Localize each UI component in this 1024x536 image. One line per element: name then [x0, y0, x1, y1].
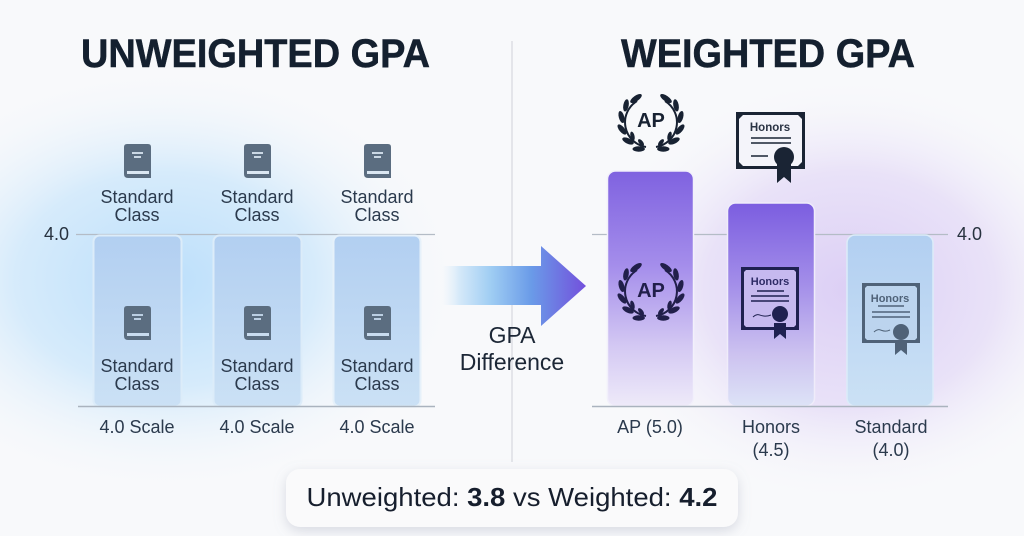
- panel: weighted chart: [592, 92, 982, 460]
- arrow label line 2: Difference: [460, 349, 564, 375]
- icon: book top 3: [364, 144, 391, 178]
- top gridline: [592, 234, 948, 236]
- labels inside bars: Standard: [220, 356, 294, 376]
- labels above bars: Standard: [340, 187, 414, 207]
- icon: AP laurel top: [616, 92, 686, 152]
- labels inside bars: Class: [114, 374, 160, 394]
- bar: Standard: [847, 235, 933, 406]
- bar labels: (4.5): [752, 440, 790, 460]
- icon: AP laurel in bar: [616, 261, 686, 321]
- title: unweighted: UNWEIGHTED GPA: [81, 32, 430, 76]
- baseline: [78, 406, 435, 408]
- labels above bars: [100, 187, 414, 225]
- icon: book top 1: [124, 144, 151, 178]
- icon: standard certificate in bar: [862, 283, 920, 355]
- bar labels: AP (5.0): [617, 417, 683, 437]
- icon: standard certificate in bar: Honors: [871, 293, 909, 305]
- bar 2: [214, 236, 302, 406]
- labels inside bars: Class: [234, 374, 280, 394]
- scale labels: [99, 417, 415, 437]
- icon: honors certificate in bar: Honors: [751, 276, 789, 288]
- bar labels: Honors: [742, 417, 800, 437]
- arrow: gpa difference: [442, 246, 586, 326]
- axis label 4.0: 4.0: [957, 224, 982, 244]
- labels above bars: Class: [354, 205, 400, 225]
- right purple glow: [585, 75, 1024, 505]
- bar 1: [94, 236, 182, 406]
- labels inside bars: [100, 356, 414, 394]
- icon: book top 2: [244, 144, 271, 178]
- panel: unweighted chart: [44, 144, 435, 437]
- labels inside bars: Standard: [100, 356, 174, 376]
- baseline: [592, 406, 948, 408]
- icon: book bar 1: [124, 306, 151, 340]
- icon: book bar 3: [364, 306, 391, 340]
- icon: honors certificate in bar: [741, 267, 799, 339]
- icon: honors certificate top: Honors: [750, 122, 790, 134]
- top gridline: [76, 234, 435, 236]
- labels inside bars: Standard: [340, 356, 414, 376]
- bar: Honors: [728, 203, 814, 406]
- labels inside bars: Class: [354, 374, 400, 394]
- labels above bars: Class: [234, 205, 280, 225]
- bar 3: [334, 236, 420, 406]
- bar: AP: [608, 171, 694, 406]
- axis label 4.0: 4.0: [44, 224, 69, 244]
- scale labels: 4.0 Scale: [99, 417, 175, 437]
- bar labels: Standard: [854, 417, 928, 437]
- scale labels: 4.0 Scale: [339, 417, 415, 437]
- labels above bars: Class: [114, 205, 160, 225]
- arrow label: GPA: [489, 322, 536, 348]
- bar labels: [617, 417, 928, 460]
- center divider: [511, 41, 513, 462]
- icon: book bar 2: [244, 306, 271, 340]
- bar labels: (4.0): [872, 440, 910, 460]
- icon: honors certificate top: [736, 112, 805, 183]
- callout: gpa comparison: Unweighted: 3.8 vs Weighted: 4.2: [306, 482, 718, 512]
- labels above bars: Standard: [220, 187, 294, 207]
- labels above bars: Standard: [100, 187, 174, 207]
- scale labels: 4.0 Scale: [219, 417, 295, 437]
- icon: AP laurel in bar: AP: [637, 280, 665, 302]
- icon: AP laurel top: AP: [637, 110, 665, 132]
- callout: gpa comparison: [286, 469, 738, 527]
- left blue glow: [0, 65, 465, 495]
- title: weighted: WEIGHTED GPA: [621, 32, 915, 76]
